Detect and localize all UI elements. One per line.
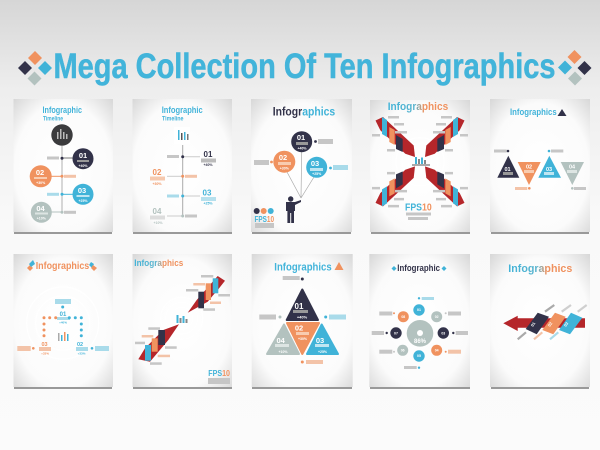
triangle 03: 03 <box>546 167 552 173</box>
rings <box>161 297 203 339</box>
radial labels <box>372 297 468 369</box>
box 02 <box>76 342 88 356</box>
balloon labels <box>254 139 348 170</box>
pyramid labels <box>259 276 346 364</box>
panel: card 8 triangle pyramid <box>252 254 353 389</box>
icon: left diamond cluster <box>18 51 52 86</box>
balloon 02: 02 <box>279 153 287 162</box>
arrow bottom-right <box>425 166 468 207</box>
step 04: 04 <box>153 207 162 216</box>
triangle 02: 02 <box>295 324 303 332</box>
triangle 04: +10% <box>278 350 288 354</box>
box 03 <box>39 342 51 356</box>
triangle 03 <box>307 324 338 354</box>
panel: card 5 triangles row <box>490 99 590 234</box>
FPS 10 mark: FPS10 <box>208 369 230 378</box>
triangle 02: +30% <box>298 337 308 341</box>
tabs lower <box>145 330 165 361</box>
center rings <box>396 138 444 186</box>
center chart <box>58 332 68 341</box>
triangle 03: +25% <box>318 350 328 354</box>
icon: small triangle <box>334 262 344 270</box>
balloon 03 <box>306 157 327 178</box>
title banner <box>18 47 592 86</box>
balloon 01: +40% <box>297 146 307 150</box>
tab 02: 02 <box>547 320 554 328</box>
tab labels <box>518 305 587 339</box>
FPS 10 mark: FPS10 <box>254 215 274 224</box>
heading: Infographics <box>388 101 448 113</box>
heading: Infographics <box>134 258 183 268</box>
step 01 <box>167 150 216 167</box>
box 01 <box>57 312 70 324</box>
triangle 03: 03 <box>316 336 324 345</box>
timeline spine <box>61 146 63 212</box>
subheading: Timeline <box>162 116 184 122</box>
box 03: +33% <box>41 352 49 356</box>
heading: Infographics <box>36 261 90 272</box>
heading icons <box>27 260 97 271</box>
step 01: 01 <box>204 150 213 159</box>
box 02: 02 <box>77 342 83 348</box>
triangle 01: 01 <box>504 167 511 173</box>
triangle 04: 04 <box>569 164 576 170</box>
heading: Infographics <box>510 107 557 117</box>
triangle 01: 01 <box>295 302 304 311</box>
center chart <box>412 157 430 166</box>
heading: Infographic <box>162 105 203 116</box>
step 01 <box>47 148 94 169</box>
node upper left: 08 <box>401 315 405 319</box>
tab 01: 01 <box>530 320 537 328</box>
node lower right: 04 <box>435 348 439 352</box>
red arrow upper <box>188 276 225 313</box>
step 04 <box>150 207 197 225</box>
step 03 <box>167 188 216 206</box>
top label <box>55 299 71 308</box>
panel: card 10 horizontal arrow <box>490 254 590 389</box>
triangle 04 <box>267 324 299 354</box>
balloon 01: 01 <box>297 133 305 142</box>
balloon 01 <box>291 131 312 152</box>
icon row <box>254 208 274 214</box>
balloon strings <box>287 151 314 198</box>
orange dot path <box>42 316 57 337</box>
heading: Infographic <box>42 105 82 116</box>
heading: Infographics <box>508 263 572 275</box>
heading: Infographics <box>274 262 332 274</box>
arrow top-left <box>372 116 415 157</box>
icon: person holding balloons <box>286 196 301 223</box>
node top: 01 <box>417 308 421 312</box>
heading: Infographics <box>273 104 335 118</box>
box 01: +40% <box>59 320 67 324</box>
panel: card 7 diagonal arrow <box>132 254 232 389</box>
side labels <box>17 346 109 351</box>
concentric rings <box>27 287 99 359</box>
balloon 03: 03 <box>311 159 319 168</box>
step 01: 01 <box>79 151 87 160</box>
heading icons <box>392 266 446 271</box>
node lower left: 06 <box>401 348 405 352</box>
red arrow <box>503 316 585 331</box>
node left: 07 <box>394 332 398 336</box>
step 04: 04 <box>36 204 45 213</box>
panel: card 1 balloon timeline <box>14 99 113 234</box>
balloon 02 <box>273 151 295 173</box>
balloon 02: +30% <box>280 166 290 170</box>
node right: 03 <box>441 332 445 336</box>
panel: card 3 balloons and person <box>251 99 352 234</box>
heading: Infographic <box>397 263 440 274</box>
step 02: 02 <box>36 168 44 177</box>
balloon chart <box>51 124 73 146</box>
step 03: 03 <box>78 186 86 195</box>
step 03 <box>47 184 94 205</box>
triangle labels <box>494 150 586 190</box>
step 01: +40% <box>203 163 213 167</box>
triangle 01: +40% <box>297 314 308 320</box>
triangle 02 <box>287 323 319 354</box>
step labels <box>135 275 230 365</box>
triangle 02: 02 <box>526 164 532 170</box>
box 02: +33% <box>78 352 86 356</box>
step 02: +30% <box>36 181 46 185</box>
tab 03: 03 <box>563 320 570 328</box>
step 02: 02 <box>153 168 162 177</box>
balloon 03: +25% <box>312 172 322 176</box>
central hub: 86% <box>414 339 427 345</box>
blue dot path <box>68 316 83 337</box>
step 02 <box>30 165 76 187</box>
center chart <box>176 315 188 323</box>
box 03: 03 <box>41 342 48 348</box>
step 03: +25% <box>203 202 213 206</box>
box 01: 01 <box>60 312 67 318</box>
FPS 10 mark: FPS10 <box>405 203 432 214</box>
panel: card 2 bracket timeline <box>132 99 232 234</box>
subheading: Timeline <box>43 116 64 122</box>
panel: card 6 ring of dots <box>14 254 113 389</box>
panel: card 4 four arrows <box>370 100 470 234</box>
step 03: 03 <box>203 188 212 198</box>
step 04 <box>31 202 76 223</box>
icon: small triangle <box>558 109 566 116</box>
step 02: +30% <box>152 182 162 186</box>
icon: right diamond cluster <box>558 50 592 86</box>
triangle 04: 04 <box>277 336 286 345</box>
step 04: +10% <box>153 221 163 225</box>
step 01: +40% <box>78 164 88 168</box>
step 04: +10% <box>37 216 47 220</box>
panel: card 9 radial diagram <box>369 254 470 389</box>
arrow bottom-left <box>372 166 415 207</box>
arrow top-right <box>425 116 468 157</box>
node bottom: 05 <box>417 354 421 358</box>
red arrow lower <box>138 324 179 362</box>
timeline spine <box>182 145 184 217</box>
step 02 <box>150 168 197 186</box>
node upper right: 02 <box>435 315 439 319</box>
chart thumbnail <box>174 127 190 144</box>
triangle 01 <box>287 290 318 320</box>
tabs upper <box>198 278 218 308</box>
step 03: +25% <box>78 199 88 203</box>
